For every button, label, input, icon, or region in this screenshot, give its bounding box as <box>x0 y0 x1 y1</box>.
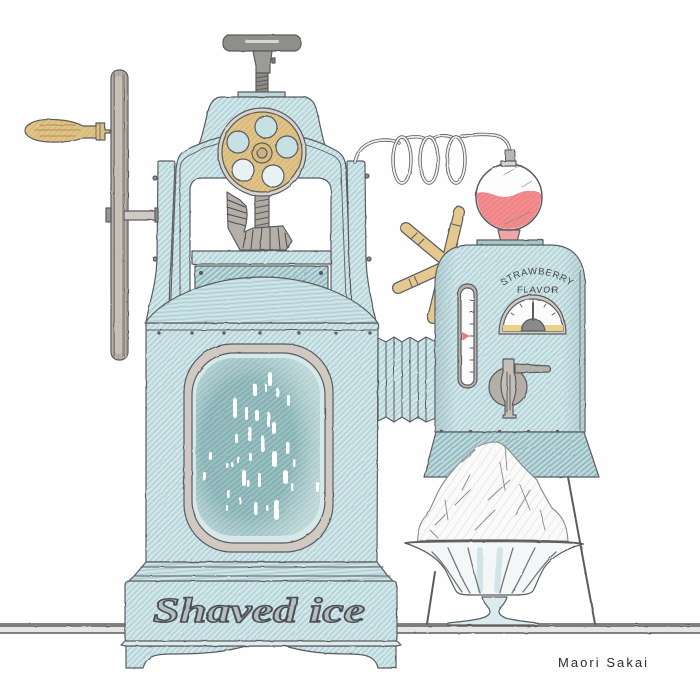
syrup tank <box>435 245 585 432</box>
coiled tube <box>355 134 515 183</box>
lower crossbar and plate <box>192 251 331 296</box>
flywheel <box>218 108 306 196</box>
tank skirt <box>424 432 599 477</box>
base feet <box>126 646 396 668</box>
window tint <box>196 358 320 536</box>
left post <box>146 161 175 322</box>
window glass <box>192 353 325 543</box>
gauge <box>499 295 566 334</box>
tank label: STRAWBERRY <box>500 268 574 285</box>
tank label second line: FLAVOR <box>517 285 559 296</box>
crank handle <box>25 119 110 142</box>
tap <box>489 359 550 418</box>
stand legs <box>427 477 595 624</box>
base plinth <box>125 581 397 642</box>
arch frame <box>170 132 352 318</box>
base lip <box>121 641 401 646</box>
base shoulder <box>125 562 397 585</box>
bellows <box>378 337 436 422</box>
glass highlight <box>196 358 320 536</box>
hand wheel <box>111 70 128 360</box>
thermometer <box>458 284 477 388</box>
brand lettering: Shaved ice <box>153 591 365 630</box>
top handle <box>223 35 301 97</box>
main body <box>146 323 378 562</box>
signature: Maori Sakai <box>558 655 647 670</box>
window frame <box>184 344 333 552</box>
shaved ice mound <box>417 442 568 541</box>
bevel gears and worm shaft <box>227 192 292 250</box>
post bolts <box>153 174 371 261</box>
bowl stem and foot <box>448 597 538 625</box>
right post <box>347 161 376 322</box>
window <box>184 344 333 552</box>
falling ice flakes <box>203 372 319 520</box>
table edge <box>0 624 700 633</box>
drive axle <box>106 208 226 222</box>
flask stand <box>477 230 543 246</box>
upper head casting <box>180 97 340 185</box>
dome top <box>145 277 378 323</box>
flask <box>476 160 542 230</box>
glass bowl <box>405 540 583 595</box>
wooden spokes <box>398 212 460 318</box>
